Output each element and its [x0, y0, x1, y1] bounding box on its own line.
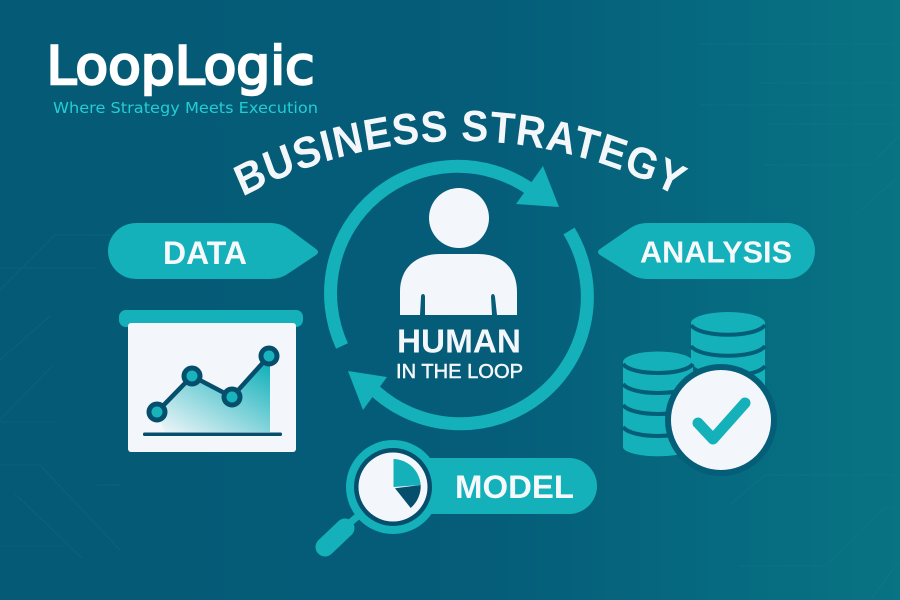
analysis tag: ANALYSIS [640, 234, 792, 270]
icon: person [400, 188, 517, 315]
data tag [108, 223, 318, 279]
model tag: MODEL [455, 469, 574, 505]
icon: magnifier with pie chart [325, 440, 440, 547]
in the loop: IN THE LOOP [396, 361, 523, 383]
panel: line chart board [119, 310, 303, 452]
left stack [623, 352, 693, 456]
logo [46, 36, 318, 117]
analysis tag [598, 223, 815, 279]
top arc arrow [331, 166, 559, 346]
handle [325, 528, 345, 547]
model tag [420, 458, 597, 514]
loop ring with arrows [331, 166, 587, 424]
bottom arc arrow [348, 231, 587, 424]
board top bar [119, 310, 303, 327]
right stack [691, 312, 765, 392]
icon: check badge [668, 367, 774, 473]
data tag: DATA [163, 235, 247, 271]
curved title: BUSINESS STRATEGY [233, 110, 688, 196]
lens [346, 440, 440, 534]
board [128, 323, 296, 452]
line chart [143, 348, 282, 436]
human: HUMAN [397, 322, 521, 360]
brand name: LoopLogic [46, 36, 314, 97]
tagline: Where Strategy Meets Execution [53, 99, 318, 117]
center label [396, 322, 523, 383]
pie chart [394, 459, 421, 508]
icon: database stacks [623, 312, 774, 473]
